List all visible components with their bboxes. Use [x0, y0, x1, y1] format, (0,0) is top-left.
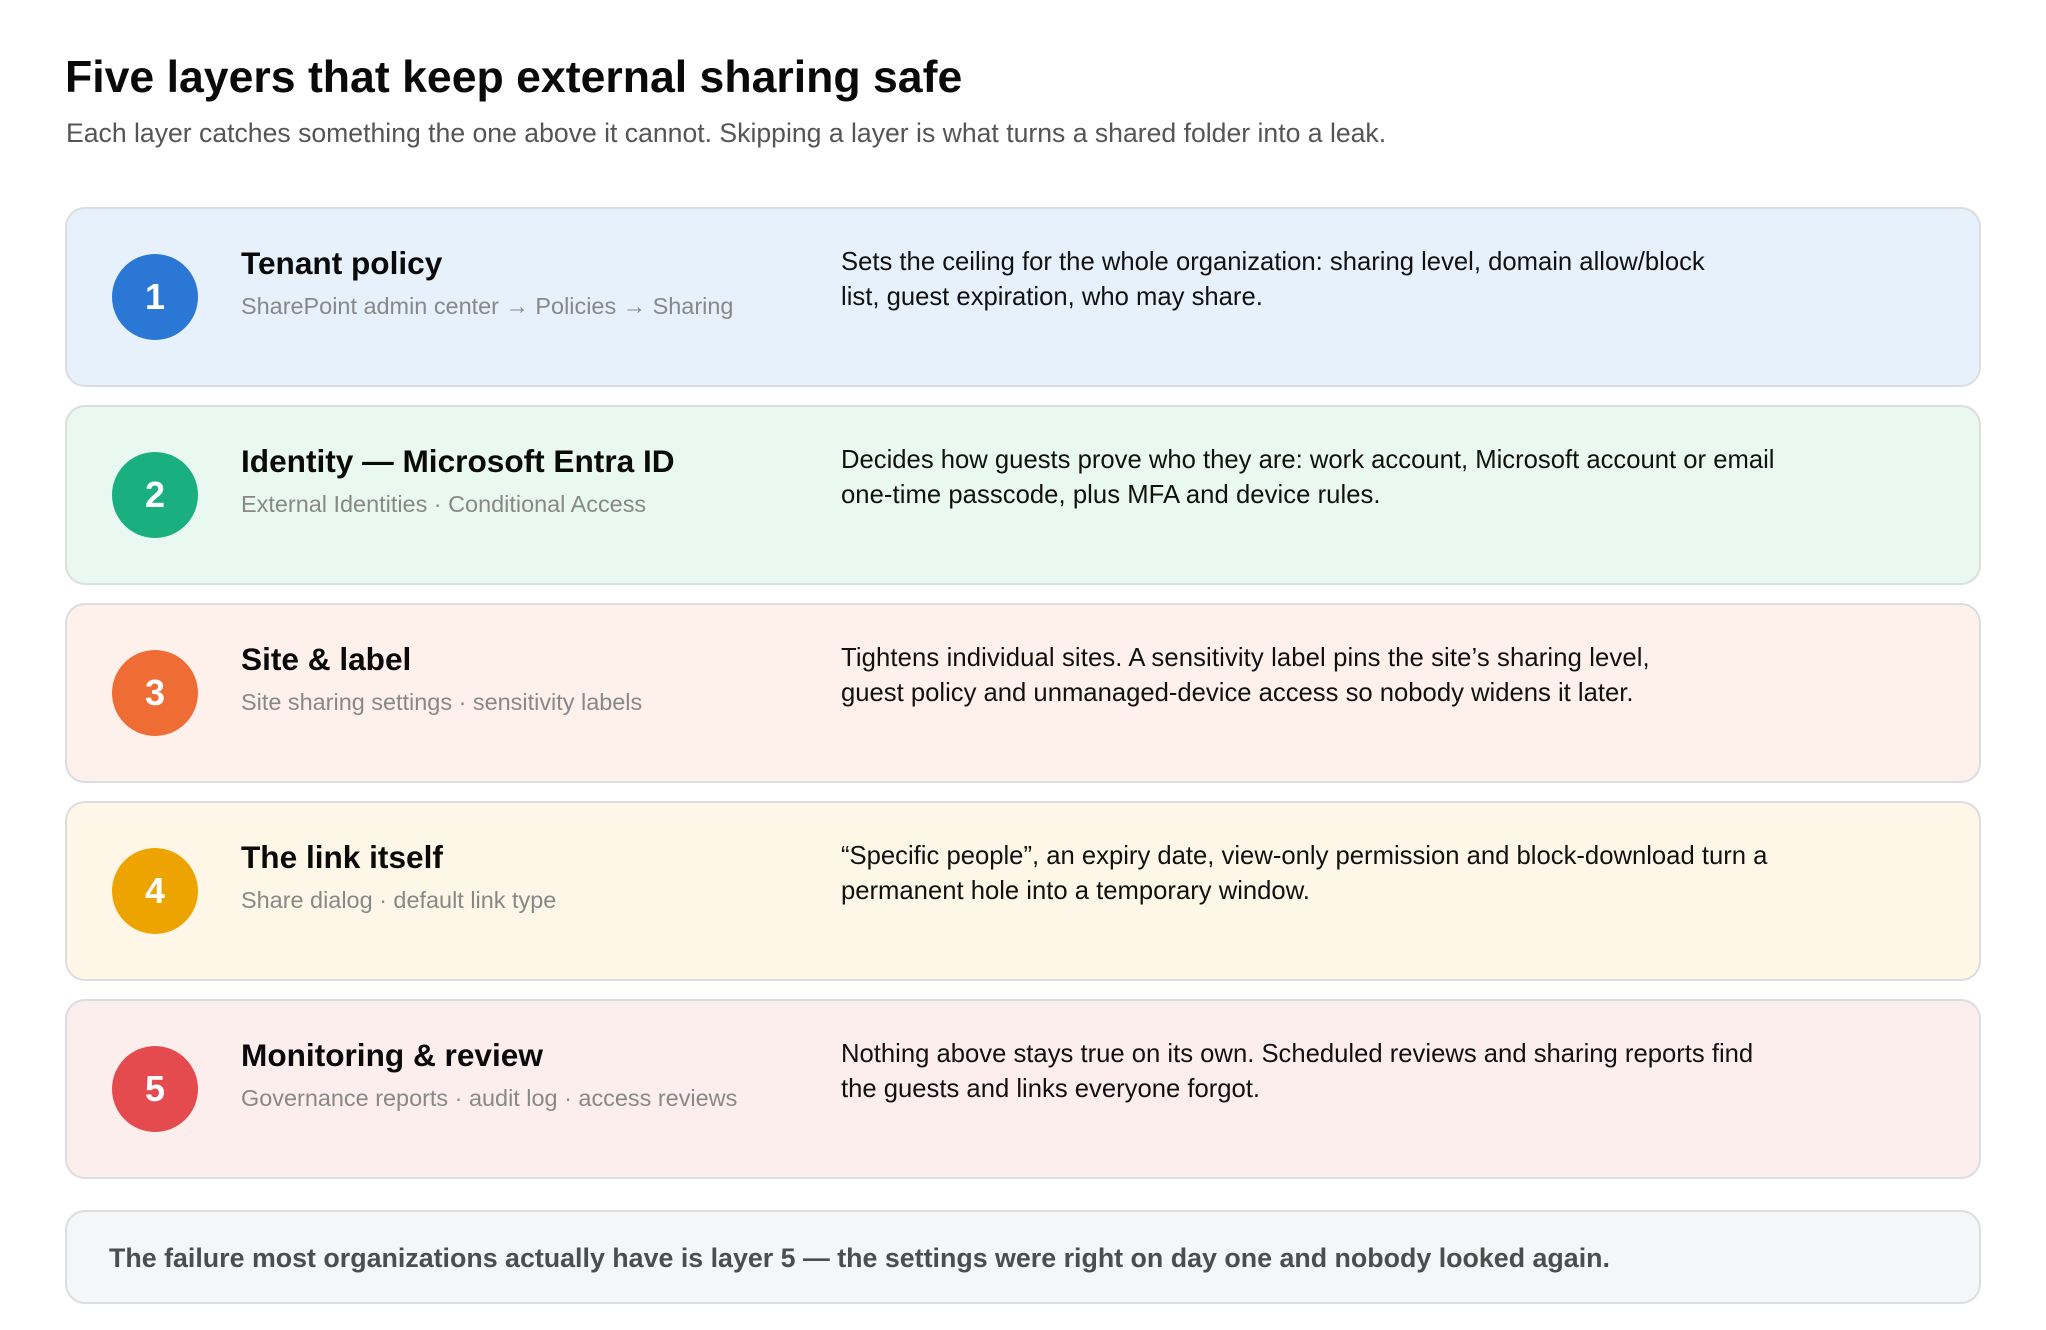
badge 5: 5: [145, 1068, 165, 1109]
badge 1: 1: [145, 276, 165, 317]
description 4: [841, 842, 1768, 904]
description 4: “Specific people”, an expiry date, view-only permission and block-download turn a: [841, 842, 1767, 870]
badge 4: [112, 848, 198, 934]
badge 1: [112, 254, 198, 340]
badge 3: 3: [145, 672, 165, 713]
panel: layer 4 the link itself: [65, 801, 1981, 981]
description 5: Nothing above stays true on its own. Scheduled reviews and sharing reports find: [841, 1040, 1753, 1068]
heading 2: Identity — Microsoft Entra ID: [241, 443, 675, 479]
title: Five layers that keep external sharing safe: [65, 53, 962, 102]
description 2: Decides how guests prove who they are: work account, Microsoft account or email: [841, 446, 1774, 474]
panel: layer 2 identity: [65, 405, 1981, 585]
description 3: [841, 644, 1650, 706]
description 2: one-time passcode, plus MFA and device rules.: [841, 480, 1381, 508]
badge 5: [112, 1046, 198, 1132]
badge 3: [112, 650, 198, 736]
heading 3: Site & label: [241, 641, 411, 677]
description 5: the guests and links everyone forgot.: [841, 1074, 1260, 1102]
description 4: permanent hole into a temporary window.: [841, 876, 1310, 904]
description 1: Sets the ceiling for the whole organization: sharing level, domain allow/block: [841, 248, 1705, 276]
heading 1: Tenant policy: [241, 245, 442, 281]
subheading 2: External Identities · Conditional Access: [241, 491, 646, 517]
panel: layer 3 site and label: [65, 603, 1981, 783]
callout text: The failure most organizations actually have is layer 5 — the settings were right on day one and nobody looked again.: [109, 1243, 1610, 1273]
badge 2: [112, 452, 198, 538]
badge 4: 4: [145, 870, 165, 911]
panel: layer 1 tenant policy: [65, 207, 1981, 387]
description 3: guest policy and unmanaged-device access so nobody widens it later.: [841, 678, 1634, 706]
badge 2: 2: [145, 474, 165, 515]
subheading 1: SharePoint admin center → Policies → Sharing: [241, 293, 733, 319]
heading 5: Monitoring & review: [241, 1037, 543, 1073]
description 1: [841, 248, 1705, 310]
subheading 3: Site sharing settings · sensitivity labels: [241, 689, 642, 715]
description 2: [841, 446, 1774, 508]
callout: [65, 1210, 1981, 1304]
subheading 5: Governance reports · audit log · access reviews: [241, 1085, 737, 1111]
subtitle: Each layer catches something the one above it cannot. Skipping a layer is what turns a shared folder into a leak.: [66, 118, 1386, 148]
subheading 4: Share dialog · default link type: [241, 887, 556, 913]
heading 4: The link itself: [241, 839, 443, 875]
description 3: Tightens individual sites. A sensitivity label pins the site’s sharing level,: [841, 644, 1650, 672]
panel: layer 5 monitoring and review: [65, 999, 1981, 1179]
description 1: list, guest expiration, who may share.: [841, 282, 1263, 310]
description 5: [841, 1040, 1753, 1102]
